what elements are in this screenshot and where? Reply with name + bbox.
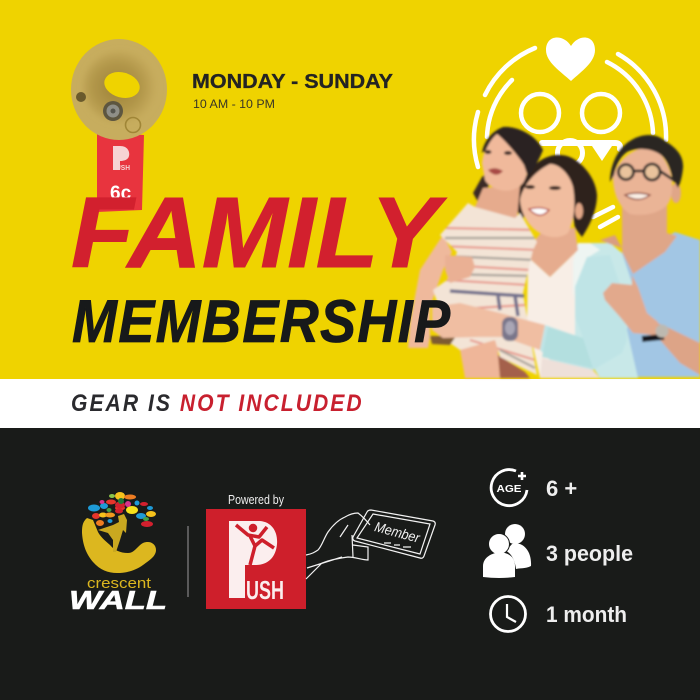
girl mouth bbox=[488, 168, 503, 175]
title: FAMILY: FAMILY bbox=[71, 177, 447, 289]
logo: Push bbox=[206, 509, 306, 609]
icon: smile band bbox=[542, 143, 620, 149]
woman hair bbox=[515, 155, 597, 237]
girl leg bbox=[458, 338, 500, 378]
man neck bbox=[622, 205, 677, 274]
shadow under hand bbox=[430, 336, 456, 345]
hours: 10 AM - 10 PM bbox=[193, 97, 275, 111]
man mouth bbox=[625, 193, 650, 200]
WALL wordmark: WALL bbox=[69, 585, 167, 615]
P letter bbox=[229, 521, 277, 598]
dark footer panel bbox=[0, 428, 700, 700]
icon: age 6+: AGE bbox=[496, 483, 522, 495]
woman hand and forearm bbox=[432, 303, 545, 350]
ribbon tag bbox=[97, 133, 144, 212]
screw bbox=[76, 92, 86, 102]
icon: smile ring bbox=[558, 140, 582, 166]
hold body bbox=[71, 39, 167, 140]
girl hair back bbox=[473, 165, 495, 202]
banner text: GEAR IS NOT INCLUDED bbox=[71, 390, 364, 416]
woman eyes bbox=[525, 185, 561, 190]
stat: people: 3 people bbox=[546, 541, 633, 566]
cardigan cuff bbox=[542, 327, 593, 368]
opening hours bbox=[192, 71, 394, 111]
emblem: family heart circle bbox=[474, 37, 666, 227]
icon: heart bbox=[546, 37, 595, 81]
yellow header panel bbox=[0, 0, 700, 379]
ribbon tag: 6c bbox=[110, 183, 132, 204]
days: MONDAY - SUNDAY bbox=[192, 71, 394, 93]
icon: age 6+ bbox=[491, 470, 527, 506]
climbing hold with ribbon bbox=[71, 39, 167, 212]
bolt bbox=[103, 101, 123, 121]
thigh shadow bbox=[498, 355, 530, 378]
crescent C bbox=[82, 518, 156, 573]
man forearm bbox=[650, 322, 700, 375]
woman hand on girl's back bbox=[445, 255, 475, 283]
cardigan sleeve bbox=[540, 255, 627, 370]
woman watch bbox=[502, 317, 518, 341]
icon: right face bbox=[582, 94, 620, 132]
woman face bbox=[520, 164, 574, 237]
dress stripes bbox=[440, 228, 538, 368]
white banner band bbox=[0, 379, 700, 428]
coloured holds bbox=[88, 492, 156, 527]
logo: Crescent Wall bbox=[69, 492, 167, 615]
crescent wordmark: crescent bbox=[87, 575, 152, 592]
illustration: hand holding member card bbox=[306, 510, 435, 579]
icon: bow tie bbox=[592, 146, 612, 161]
woman cardigan bbox=[575, 243, 638, 378]
icon: clock bbox=[490, 596, 526, 632]
girl hair bbox=[482, 127, 543, 177]
girl neck bbox=[475, 185, 520, 220]
title: MEMBERSHIP: MEMBERSHIP bbox=[72, 288, 451, 356]
girl face bbox=[482, 133, 528, 191]
man watch bbox=[656, 324, 668, 338]
girl dress bbox=[433, 203, 538, 375]
powered by label: Powered by bbox=[228, 492, 284, 507]
man watch band bbox=[642, 334, 664, 342]
hold opening bbox=[101, 68, 143, 102]
climber bbox=[98, 514, 127, 552]
woman ear bbox=[575, 203, 583, 219]
cardigan inner panel bbox=[573, 243, 600, 300]
girl upper arm and arm bbox=[408, 235, 452, 348]
man ear bbox=[671, 183, 681, 203]
icon: left face bbox=[521, 94, 559, 132]
man glasses bbox=[618, 164, 675, 181]
man face bbox=[613, 147, 672, 215]
ribbon tag: USH bbox=[116, 163, 130, 172]
hand bbox=[306, 513, 370, 579]
man hand on shoulder bbox=[600, 235, 622, 248]
family photo bbox=[408, 127, 700, 378]
icon: people bbox=[483, 524, 531, 578]
climber cut-out bbox=[236, 525, 274, 565]
embossed logo bbox=[126, 118, 140, 132]
man hair bbox=[610, 135, 683, 188]
member text: Member bbox=[373, 518, 423, 546]
USH text: USH bbox=[246, 575, 284, 605]
woman neck bbox=[528, 228, 578, 277]
woman white shirt bbox=[527, 250, 590, 378]
woman mouth bbox=[529, 208, 549, 215]
divider bbox=[188, 526, 189, 597]
girl eyes bbox=[484, 150, 512, 155]
lower shirt bbox=[540, 358, 600, 378]
man hand bbox=[603, 275, 658, 335]
dress belt bbox=[450, 291, 524, 316]
stat: age: 6 + bbox=[546, 476, 577, 501]
stat: duration: 1 month bbox=[546, 602, 627, 627]
man shirt bbox=[622, 232, 700, 377]
